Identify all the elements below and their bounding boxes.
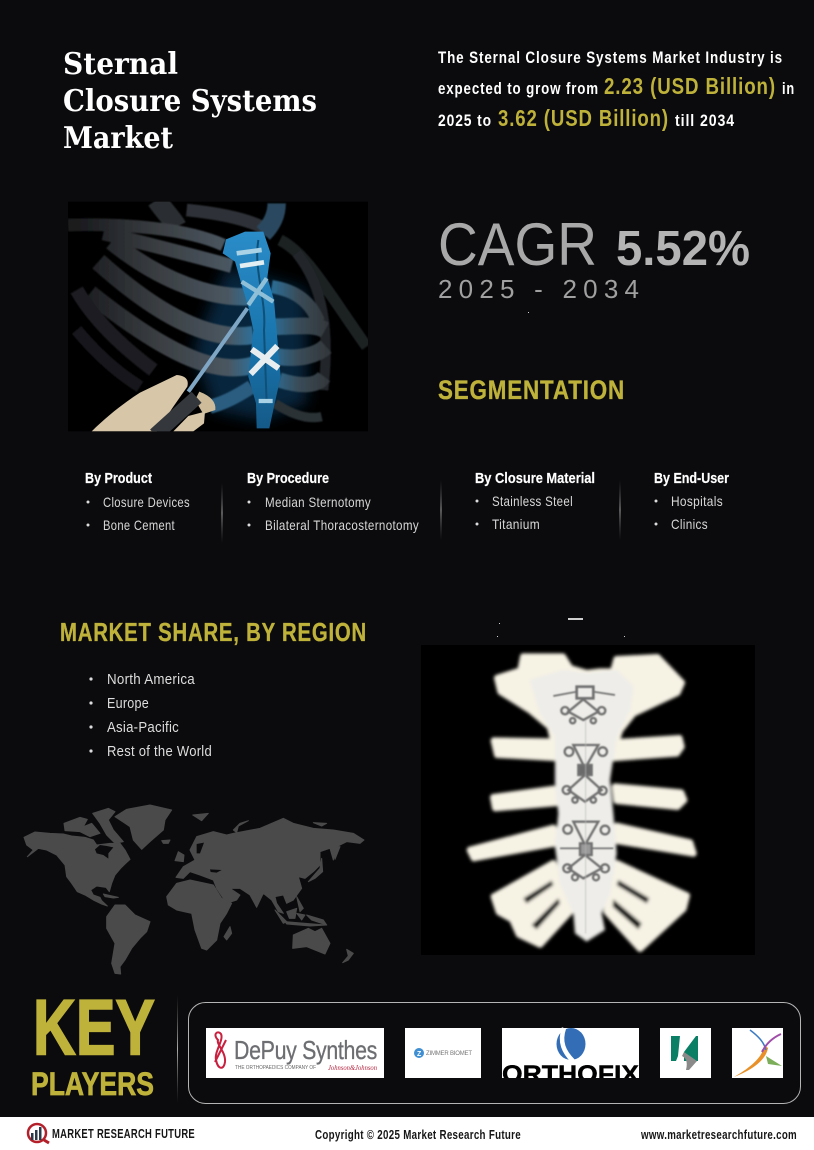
logo: Zimmer Biomet: ZIMMER BIOMET [426, 1051, 472, 1057]
key players heading [31, 982, 155, 1102]
CAGR figure: 5.52% [616, 222, 750, 276]
region list: Rest of the World [107, 743, 212, 760]
market share heading: MARKET SHARE, BY REGION [60, 617, 367, 647]
segment: by closure material: By Closure Material [475, 470, 595, 487]
segment: by product: By Product [85, 470, 152, 487]
key players panel [188, 1002, 800, 1104]
image: sternum model with titanium plates [421, 645, 755, 955]
market growth summary text: 3.62 (USD Billion) [498, 105, 669, 131]
market growth summary text: 2.23 (USD Billion) [604, 73, 776, 99]
segment: by product: Closure Devices [103, 494, 190, 510]
footer logo icon [28, 1124, 49, 1143]
segment: by end-user: Hospitals [671, 493, 723, 509]
logo: DePuy Synthes [206, 1028, 384, 1078]
logo: DePuy Synthes: DePuy Synthes [234, 1035, 377, 1065]
segment: by end-user: Clinics [671, 516, 708, 532]
logo: DePuy Synthes: Johnson&Johnson [328, 1064, 377, 1072]
CAGR figure: CAGR [438, 211, 597, 278]
copyright: Copyright © 2025 Market Research Future [315, 1127, 521, 1142]
market growth summary text: in [782, 79, 795, 98]
segment: by closure material: Stainless Steel [492, 493, 573, 509]
market growth summary text: 2025 to [438, 111, 492, 130]
key players heading: KEY [33, 982, 155, 1072]
logo: Orthofix [502, 1027, 639, 1078]
region list: North America [107, 671, 195, 688]
market growth summary text [438, 48, 795, 131]
segment: by product: Bone Cement [103, 517, 175, 533]
market growth summary text: expected to grow from [438, 79, 599, 98]
segmentation heading: SEGMENTATION [438, 375, 625, 405]
logo: Orthofix: ORTHOFIX [502, 1061, 639, 1088]
CAGR figure [438, 211, 750, 278]
segment: by procedure: Bilateral Thoracosternotomy [265, 517, 419, 533]
segment: by product [85, 470, 190, 533]
title: Market [63, 121, 173, 156]
logo: X swoosh mark [732, 1028, 783, 1078]
region list [89, 671, 212, 760]
image: sternum closure illustration with ribs and surgical tool [68, 200, 368, 435]
logo: Zimmer Biomet: Z [417, 1051, 422, 1058]
marks above second image [497, 312, 625, 637]
segment: by end-user [654, 470, 729, 532]
segment: by closure material [475, 470, 595, 532]
world map [24, 805, 364, 974]
title: Sternal [63, 47, 178, 82]
title: Closure Systems [63, 84, 317, 119]
segment: by closure material: Titanium [492, 516, 540, 532]
logo: K mark [660, 1028, 711, 1078]
CAGR period: 2025 - 2034 [438, 274, 639, 304]
segment: by end-user: By End-User [654, 470, 729, 487]
footer bar [0, 1117, 814, 1150]
region list: Asia-Pacific [107, 719, 179, 736]
segment: by procedure: Median Sternotomy [265, 494, 371, 510]
region list: Europe [107, 695, 149, 712]
segment: by procedure: By Procedure [247, 470, 329, 487]
segment: by procedure [247, 470, 419, 533]
title [63, 47, 317, 156]
key players heading: PLAYERS [31, 1066, 154, 1102]
logo: DePuy Synthes: THE ORTHOPAEDICS COMPANY OF [235, 1065, 316, 1071]
logo: Zimmer Biomet [405, 1028, 481, 1078]
footer brand name: MARKET RESEARCH FUTURE [52, 1126, 195, 1141]
market growth summary text: till 2034 [675, 111, 735, 130]
